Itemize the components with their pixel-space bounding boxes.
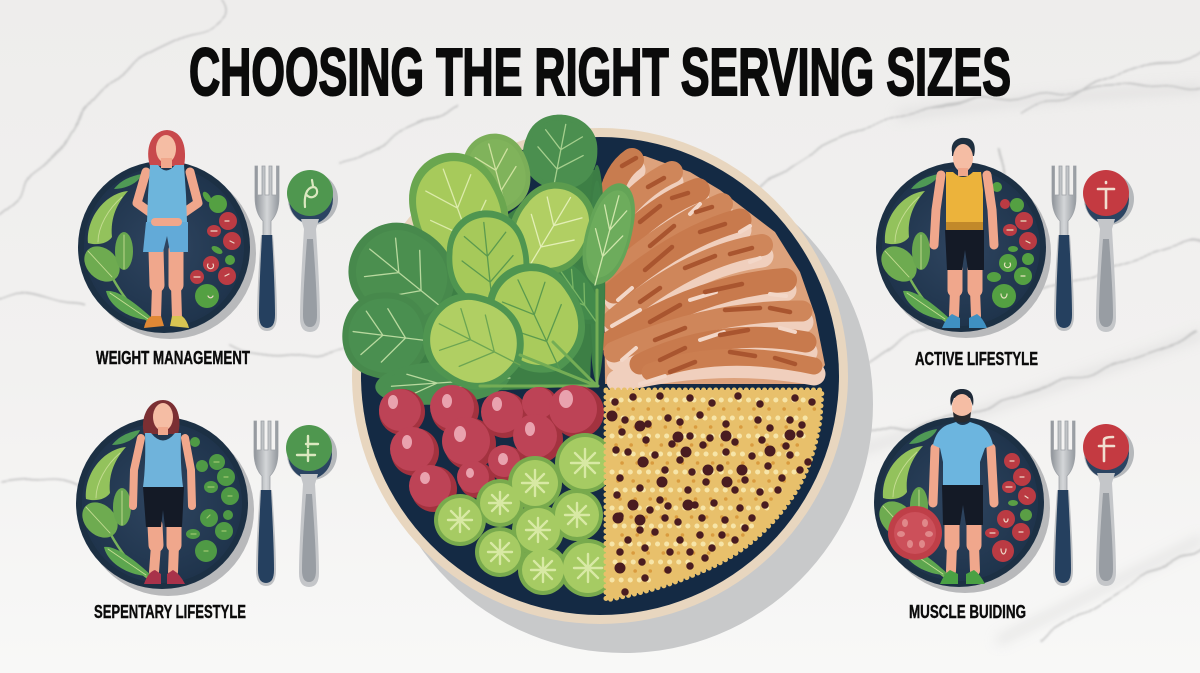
- food items: [186, 437, 239, 562]
- plate shadow: [375, 155, 873, 653]
- plate: [77, 161, 256, 339]
- food: spinach leaves: [329, 108, 644, 409]
- plate: [874, 162, 1051, 338]
- person: woman in blue: [137, 130, 198, 328]
- food: berries: [379, 385, 604, 512]
- spoon with red badge: [1083, 170, 1134, 332]
- panel: active lifestyle: [874, 138, 1134, 369]
- food items: [987, 182, 1037, 308]
- person: man in blue tee: [933, 389, 994, 584]
- label: MUSCLE BUIDING: [909, 602, 1026, 622]
- fork: [254, 421, 278, 586]
- tomato slice: [888, 506, 942, 560]
- label: WEIGHT MANAGEMENT: [96, 348, 250, 368]
- spoon with green badge: [286, 425, 337, 587]
- plate: [75, 417, 254, 596]
- food: grilled meat slices: [603, 156, 825, 384]
- food: cucumber slices: [434, 433, 617, 597]
- food: quinoa: [606, 390, 822, 600]
- plate rim: [352, 128, 848, 624]
- fork: [1051, 421, 1075, 586]
- fork: [255, 166, 279, 331]
- person: woman in tank top: [133, 400, 192, 584]
- food items: [190, 190, 241, 308]
- label: SEPENTARY LIFESTYLE: [94, 602, 246, 622]
- panel: main plate: [329, 108, 873, 653]
- plate surface: [361, 137, 839, 615]
- plate: [872, 417, 1050, 593]
- fork: [1052, 166, 1076, 331]
- panel: weight management: [77, 130, 338, 368]
- label: ACTIVE LIFESTYLE: [915, 349, 1038, 369]
- food items: [985, 453, 1036, 562]
- person: man in yellow tank: [934, 138, 994, 328]
- spoon with green badge: [287, 170, 338, 332]
- spoon with red badge: [1083, 424, 1134, 586]
- panel: sedentary lifestyle: [75, 400, 337, 622]
- panel: muscle building: [872, 389, 1134, 622]
